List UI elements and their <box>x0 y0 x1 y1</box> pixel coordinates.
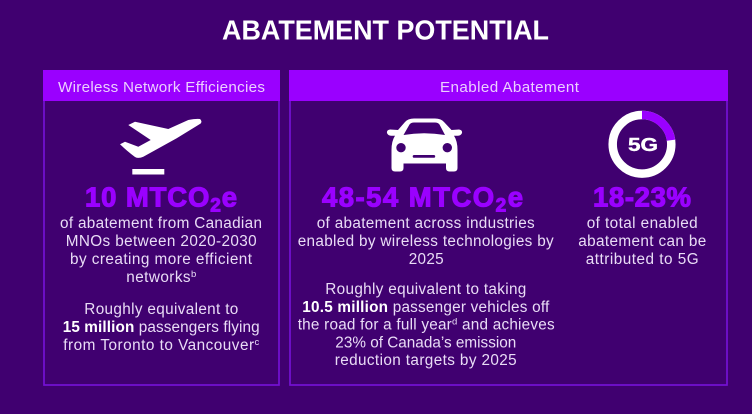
text: flight equivalence: from Toronto to Vancouver <box>63 337 254 354</box>
text: vehicle equivalence: and achieves <box>458 316 555 334</box>
text: abatement description: of abatement from Canadian <box>60 215 262 232</box>
panel: wireless network efficiencies <box>43 70 280 385</box>
panel header <box>43 70 280 101</box>
text: enabled abatement description: of abatement across industries <box>317 215 535 232</box>
text: abatement description: by creating more efficient <box>70 251 253 268</box>
text: enabled abatement description: enabled by wireless technologies by <box>298 233 554 250</box>
text: vehicle equivalence: the road for a full year <box>298 316 452 334</box>
text: vehicle equivalence: reduction targets by 2025 <box>335 352 517 369</box>
icon: 5G donut <box>613 115 671 174</box>
icon: airplane taking off <box>120 119 201 174</box>
text: flight equivalence: c <box>255 337 260 348</box>
text: vehicle equivalence: d <box>452 316 457 328</box>
title: ABATEMENT POTENTIAL <box>222 14 549 46</box>
stat: 18-23%: 18-23% <box>593 182 691 212</box>
panel: enabled abatement <box>289 70 728 385</box>
stat: 10 MTCO2e: 2 <box>210 196 221 216</box>
panel header: Wireless Network Efficiencies <box>58 79 265 96</box>
text: abatement description <box>60 215 262 286</box>
stat: 48-54 MTCO2e: 2 <box>496 196 506 216</box>
panel header <box>289 70 728 101</box>
text: flight equivalence: 15 million passengers flying <box>63 319 260 336</box>
panel header: Enabled Abatement <box>440 79 580 96</box>
text: abatement description: MNOs between 2020-2030 <box>66 233 257 250</box>
text: vehicle equivalence: Roughly equivalent to taking <box>325 281 526 298</box>
text: 5G attribution: abatement can be <box>578 233 706 250</box>
text: flight equivalence <box>63 301 260 354</box>
text: flight equivalence: Roughly equivalent to <box>84 301 238 318</box>
text: vehicle equivalence: 23% of Canada’s emission <box>335 334 516 352</box>
stat: 48-54 MTCO2e: e <box>508 182 523 212</box>
icon: 5G donut: 5G <box>628 134 658 155</box>
text: vehicle equivalence <box>298 281 555 369</box>
text: abatement description: b <box>191 269 196 280</box>
text: enabled abatement description <box>298 215 554 268</box>
text: 5G attribution <box>578 215 706 268</box>
icon: car <box>387 118 462 172</box>
stat: 10 MTCO2e: e <box>222 182 237 212</box>
stat: 10 MTCO2e: 10 MTCO <box>85 182 209 212</box>
text: 5G attribution: of total enabled <box>587 215 698 232</box>
text: 5G attribution: attributed to 5G <box>586 251 699 268</box>
text: abatement description: networks <box>126 269 191 286</box>
text: enabled abatement description: 2025 <box>409 251 444 268</box>
stat: 48-54 MTCO2e: 48-54 MTCO <box>322 182 494 212</box>
text: vehicle equivalence: 10.5 million passenger vehicles off <box>302 299 550 316</box>
